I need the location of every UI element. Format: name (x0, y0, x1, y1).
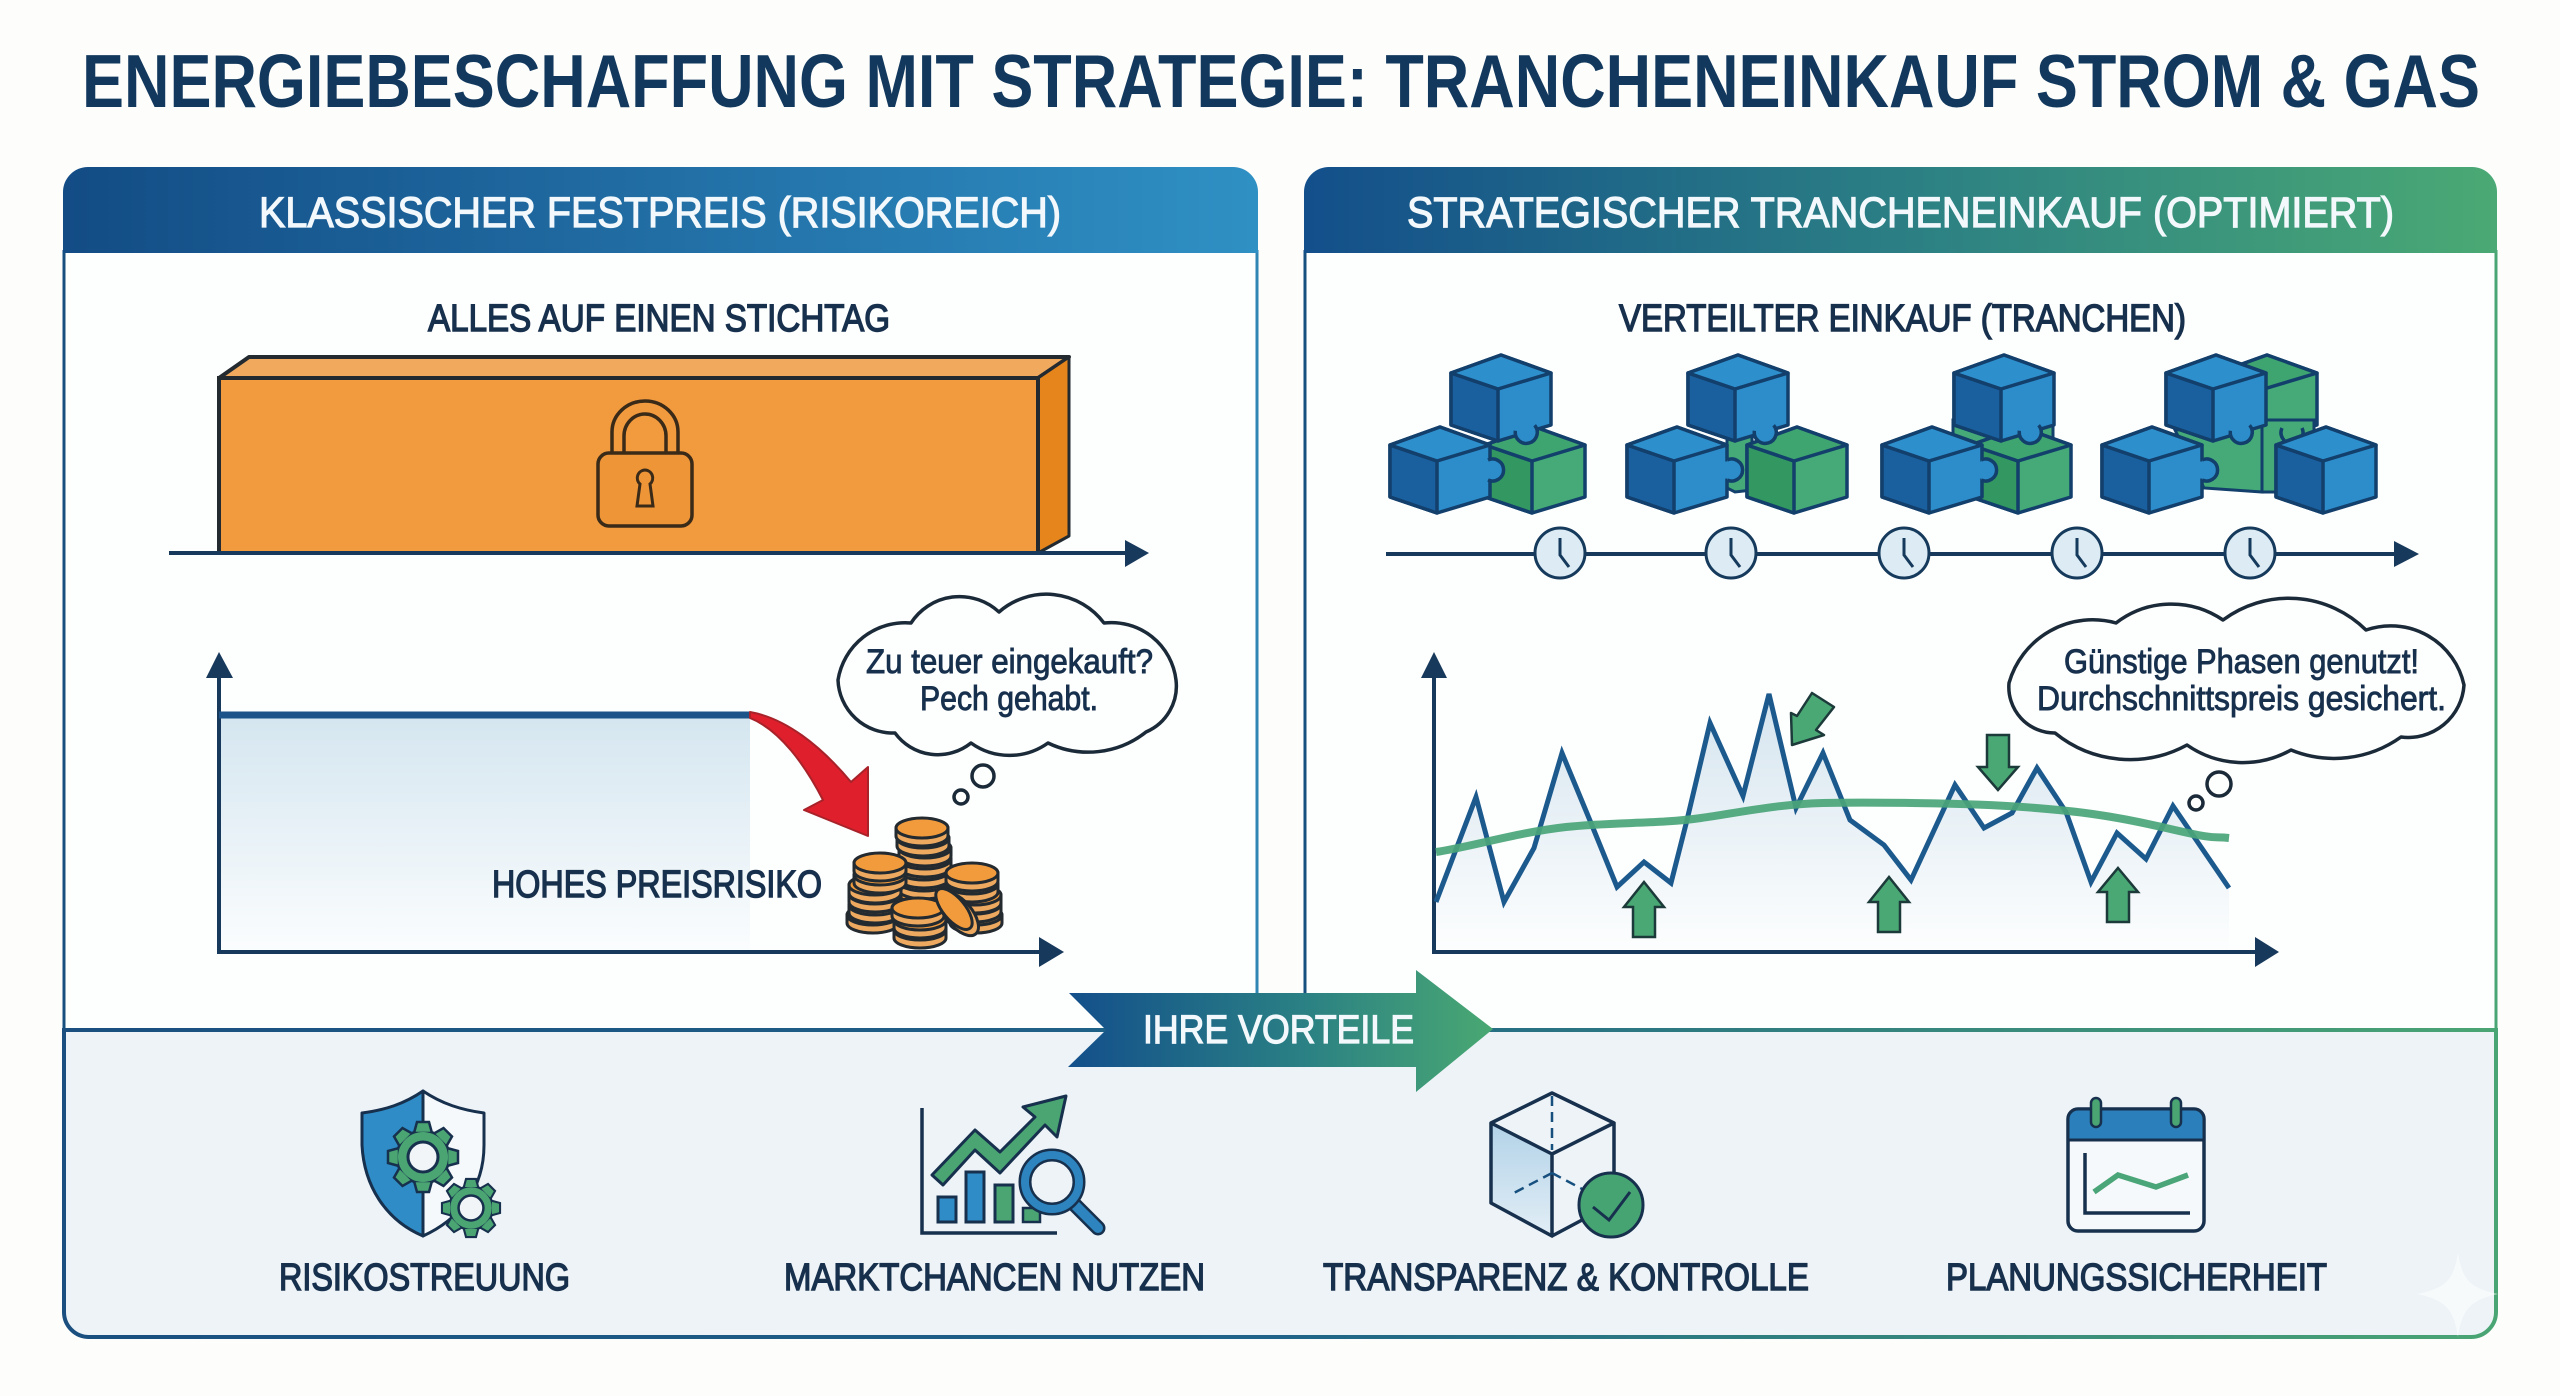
band background (64, 1030, 2496, 1337)
icon: calendar with trend line (2068, 1098, 2204, 1231)
chart axes (206, 652, 1064, 967)
panel header right: STRATEGISCHER TRANCHENEINKAUF (OPTIMIERT) (1407, 189, 2394, 237)
buy arrow up 2 (1869, 877, 1909, 932)
tranche cube group 4 (2102, 355, 2376, 513)
panel: Ihre Vorteile band (64, 970, 2498, 1337)
benefit: Marktchancen nutzen (784, 1096, 1205, 1299)
thought bubble left: Pech gehabt. (920, 680, 1098, 718)
tranche cube group 2 (1627, 355, 1847, 513)
benefit: Transparenz & Kontrolle (1323, 1093, 1809, 1299)
average price line (1436, 803, 2229, 852)
volatile market price line (1436, 694, 2229, 902)
thought bubble right (2009, 598, 2464, 810)
icon: transparent cube with check (1491, 1093, 1643, 1237)
arrow down (1978, 735, 2018, 790)
panel: klassischer Festpreis (63, 167, 1258, 1040)
banner arrow (1068, 970, 1493, 1092)
thought bubble right: Durchschnittspreis gesichert. (2037, 680, 2446, 718)
label high price risk: HOHES PREISRISIKO (492, 864, 822, 906)
panel right border green (2494, 250, 2498, 1040)
panel: strategischer Trancheneinkauf (1304, 167, 2497, 1040)
chart area fill right (1436, 694, 2229, 952)
thought bubble left: Zu teuer eingekauft? (866, 643, 1153, 681)
panel header left: KLASSISCHER FESTPREIS (RISIKOREICH) (259, 189, 1061, 237)
panel body left (64, 253, 1257, 1030)
buy arrow up 1 (1624, 882, 1664, 937)
arrow diagonal (1791, 693, 1834, 745)
panel left border right side (1304, 250, 1306, 1032)
watermark sparkle (2417, 1252, 2498, 1337)
benefit: Marktchancen nutzen: MARKTCHANCEN NUTZEN (784, 1257, 1205, 1299)
icon: chart with magnifier (922, 1096, 1098, 1233)
subheading left: ALLES AUF EINEN STICHTAG (428, 298, 890, 340)
panel left border (62, 250, 66, 1040)
chart axes right (1421, 652, 2279, 967)
orange block with lock (219, 357, 1069, 553)
buy arrow up 3 (2098, 868, 2138, 922)
benefit: Risikostreuung: RISIKOSTREUUNG (279, 1257, 570, 1299)
icon: shield with gears (362, 1091, 500, 1237)
panel header right (1304, 167, 2497, 253)
thought bubble right: Günstige Phasen genutzt! (2064, 643, 2419, 681)
benefit: Transparenz & Kontrolle: TRANSPARENZ & KONTROLLE (1323, 1257, 1809, 1299)
red falling arrow (750, 712, 868, 836)
price chart left (206, 594, 1176, 967)
fixed price line (219, 712, 750, 718)
timeline with clocks (1386, 528, 2419, 578)
banner arrow: IHRE VORTEILE (1143, 1008, 1414, 1052)
subheading right: VERTEILTER EINKAUF (TRANCHEN) (1619, 298, 2186, 340)
benefit: Risikostreuung (279, 1091, 570, 1299)
thought bubble left (838, 594, 1176, 804)
panel right border (1256, 250, 1258, 1032)
price chart right (1421, 598, 2464, 967)
benefit: Planungssicherheit (1946, 1098, 2327, 1299)
icon: coin stacks (847, 818, 1002, 948)
chart area fill (219, 718, 750, 952)
tranche cube group 1 (1390, 355, 1585, 513)
icon: padlock (598, 401, 692, 526)
timeline arrow left (169, 540, 1149, 567)
benefit: Planungssicherheit: PLANUNGSSICHERHEIT (1946, 1257, 2327, 1299)
panel header left (63, 167, 1258, 253)
tranche cube group 3 (1882, 355, 2071, 513)
panel body right (1305, 253, 2496, 1030)
